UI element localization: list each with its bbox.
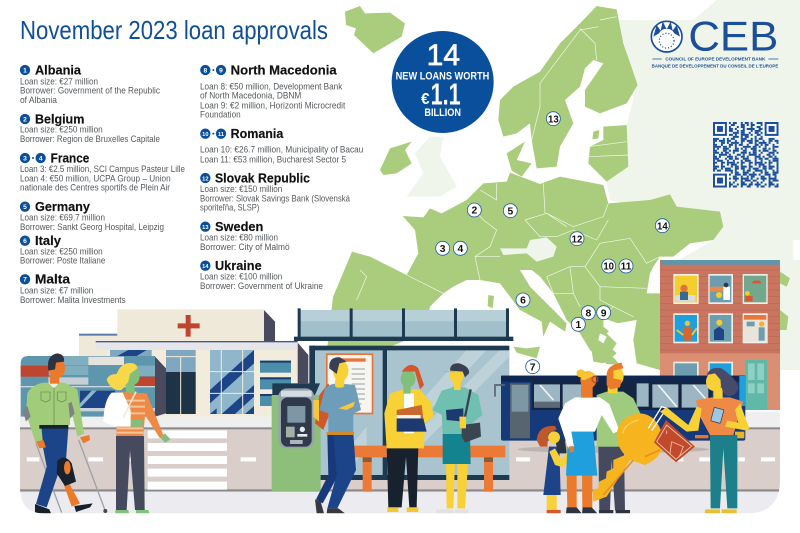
marker 14: 14 bbox=[657, 221, 668, 232]
logo: CEB: CEB bbox=[688, 14, 778, 60]
entry: North Macedonia: Loan 8: €50 million, Development Bank bbox=[200, 81, 343, 91]
entry: Ukraine: Borrower: Government of Ukraine bbox=[200, 281, 323, 291]
entry: Slovak Republic: sporiteľňa, SLSP) bbox=[200, 203, 259, 213]
Denmark bbox=[507, 142, 532, 177]
QR code bbox=[713, 122, 779, 188]
entry: Slovak Republic bbox=[200, 170, 350, 213]
entry: North Macedonia bbox=[200, 63, 346, 120]
person: woman in teal with bag bbox=[433, 363, 482, 513]
marker 8 bbox=[581, 306, 595, 320]
entry: Sweden: 13 bbox=[202, 225, 208, 231]
entry: Sweden: Borrower: City of Malmö bbox=[200, 242, 290, 252]
entry: Germany: 5 bbox=[23, 204, 27, 211]
logo: CEB: COUNCIL OF EUROPE DEVELOPMENT BANK bbox=[665, 57, 766, 62]
entry: France: 4 bbox=[39, 155, 43, 162]
road markings bbox=[27, 430, 775, 490]
entry: Romania: Loan 11: €53 million, Bucharest Sector 5 bbox=[200, 154, 346, 164]
entry: Albania: Albania bbox=[35, 63, 82, 78]
entry: North Macedonia: Loan 9: €2 million, Horizonti Microcredit bbox=[200, 100, 346, 110]
window: blue worker bbox=[673, 313, 699, 343]
entry: North Macedonia: 8 bbox=[203, 67, 207, 74]
entry: Belgium: Loan size: €250 million bbox=[20, 125, 103, 135]
marker 6: 6 bbox=[520, 296, 526, 307]
entry: Germany bbox=[20, 199, 164, 232]
entry: Malta: 7 bbox=[23, 277, 27, 284]
entry: Albania: 1 bbox=[23, 67, 27, 74]
callout: 14 new loans worth 1.1 billion: NEW LOANS WORTH bbox=[396, 70, 489, 82]
door bbox=[745, 360, 767, 410]
crosswalk bbox=[148, 430, 227, 490]
window: teal person bbox=[708, 313, 733, 343]
marker 1: 1 bbox=[575, 320, 581, 331]
entry: France bbox=[20, 150, 185, 193]
entry: Ukraine: Ukraine bbox=[215, 258, 262, 273]
marker 13: 13 bbox=[548, 114, 559, 125]
marker 5: 5 bbox=[507, 206, 513, 217]
entry: Belgium: 2 bbox=[23, 116, 27, 123]
person: woman in yellow cardigan bbox=[384, 365, 433, 512]
Scandinavia bbox=[498, 6, 638, 168]
entry: Italy: Borrower: Poste Italiane bbox=[20, 256, 105, 266]
marker 6 bbox=[516, 293, 530, 307]
callout: 14 new loans worth 1.1 billion: 14 bbox=[427, 39, 460, 72]
entry: Romania bbox=[200, 126, 363, 164]
entry: Germany: Borrower: Sankt Georg Hospital, Leipzig bbox=[20, 222, 164, 232]
map markers bbox=[436, 112, 669, 374]
marker 9 bbox=[597, 306, 611, 320]
entry: Sweden: Sweden bbox=[215, 219, 263, 234]
entry: North Macedonia: 9 bbox=[219, 67, 223, 74]
entry: North Macedonia: of North Macedonia, DBNM bbox=[200, 91, 301, 101]
logo: CEB: BANQUE DE DEVELOPPEMENT DU CONSEIL DE L'EUROPE bbox=[652, 64, 778, 69]
entry: Ukraine bbox=[200, 258, 323, 291]
marker 11: 11 bbox=[621, 262, 632, 273]
person: woman in white with blue skirt bbox=[558, 369, 619, 513]
marker 14 bbox=[655, 219, 669, 233]
entry: Germany: Germany bbox=[35, 199, 91, 214]
entry: Romania: Romania bbox=[231, 126, 284, 141]
building: brick apartment block bbox=[660, 260, 780, 410]
person: woman with phone bbox=[660, 368, 749, 513]
callout: 14 new loans worth 1.1 billion: BILLION bbox=[424, 107, 461, 119]
entry: Romania: 10 bbox=[202, 132, 208, 138]
entry: Belgium: Borrower: Region de Bruxelles Capitale bbox=[20, 134, 160, 144]
window: orange kitchen bbox=[743, 313, 768, 343]
person: girl bbox=[536, 426, 568, 514]
entry: Albania: Borrower: Government of the Republic bbox=[20, 86, 161, 96]
entry: North Macedonia: Foundation bbox=[200, 110, 241, 120]
entry: Slovak Republic: Loan size: €150 million bbox=[200, 184, 282, 194]
entry: Malta: Borrower: Malita Investments bbox=[20, 295, 126, 305]
entry: North Macedonia: North Macedonia bbox=[231, 63, 337, 78]
Austria bbox=[500, 237, 557, 262]
callout: 14 new loans worth 1.1 billion bbox=[392, 31, 494, 133]
entry: Italy bbox=[20, 233, 105, 266]
window: green room bbox=[743, 274, 768, 304]
ground bbox=[20, 412, 780, 515]
marker 8: 8 bbox=[585, 308, 591, 319]
bus bbox=[495, 376, 745, 453]
marker 9: 9 bbox=[601, 308, 607, 319]
bench bbox=[354, 446, 505, 492]
entry: Slovak Republic: Slovak Republic bbox=[215, 170, 310, 185]
entry: Italy: 6 bbox=[23, 238, 27, 245]
Ireland bbox=[380, 142, 412, 175]
callout: 14 new loans worth 1.1 billion: 1.1 bbox=[431, 78, 461, 112]
entry: Albania: Loan size: €27 million bbox=[20, 76, 98, 86]
title: November 2023 loan approvals bbox=[20, 15, 328, 45]
ticket machine bbox=[272, 383, 321, 492]
loan list bbox=[20, 63, 363, 305]
entry: Romania: 11 bbox=[218, 132, 224, 138]
bus shelter bbox=[294, 308, 513, 492]
marker 2: 2 bbox=[471, 206, 477, 217]
marker 10: 10 bbox=[603, 262, 614, 273]
entry: France: 3 bbox=[23, 155, 27, 162]
marker 11 bbox=[619, 259, 633, 273]
entry: Germany: Loan size: €69.7 million bbox=[20, 212, 105, 222]
person: blonde woman with sling bbox=[103, 363, 171, 513]
entry: Sweden bbox=[200, 219, 290, 252]
entry: Sweden: Loan size: €80 million bbox=[200, 233, 278, 243]
mainland Europe bbox=[327, 173, 723, 370]
marker 3: 3 bbox=[440, 244, 446, 255]
marker 5 bbox=[503, 204, 517, 218]
marker 4: 4 bbox=[457, 244, 463, 255]
marker 7 bbox=[526, 360, 540, 374]
marker 3 bbox=[436, 241, 450, 255]
entry: Slovak Republic: Borrower: Slovak Savings Bank (Slovenská bbox=[200, 193, 350, 203]
entry: Italy: Italy bbox=[35, 233, 62, 248]
logo: CEB bbox=[651, 14, 778, 69]
marker 2 bbox=[467, 203, 481, 217]
entry: Ukraine: Loan size: €100 million bbox=[200, 272, 282, 282]
entry: Albania bbox=[20, 63, 161, 105]
entry: Belgium: Belgium bbox=[35, 111, 84, 126]
icon: golden key bbox=[593, 407, 667, 502]
marker 13 bbox=[546, 112, 560, 126]
person: man with crutches bbox=[23, 353, 107, 513]
marker 4 bbox=[453, 241, 467, 255]
callout: 14 new loans worth 1.1 billion: € bbox=[421, 91, 430, 108]
person: man at ticket machine bbox=[313, 357, 361, 513]
entry: Belgium bbox=[20, 111, 160, 144]
entry: Ukraine: 14 bbox=[202, 264, 209, 270]
window: lower middle bbox=[708, 362, 733, 378]
hospital bbox=[79, 309, 308, 417]
Baltic states bbox=[588, 125, 628, 182]
entry: France: Loan 4: €50 million, UCPA Group – Union bbox=[20, 173, 171, 183]
entry: Malta: Malta bbox=[35, 272, 71, 287]
icon: house key tag bbox=[654, 420, 695, 462]
marker 7: 7 bbox=[530, 362, 536, 373]
person: man in green shirt bbox=[597, 363, 643, 513]
marker 1 bbox=[571, 317, 585, 331]
entry: Romania: Loan 10: €26.7 million, Municipality of Bacau bbox=[200, 145, 363, 155]
window: lower left bbox=[673, 362, 699, 378]
window: teal living room bbox=[708, 274, 733, 304]
entry: Albania: of Albania bbox=[20, 95, 57, 105]
entry: Italy: Loan size: €250 million bbox=[20, 246, 103, 256]
entry: France: Loan 3: €2.5 million, SCI Campus Pasteur Lille bbox=[20, 164, 185, 174]
window: yellow bbox=[673, 274, 699, 304]
map of Europe bbox=[327, 0, 800, 370]
icon: red cross bbox=[178, 315, 200, 337]
entry: France: France bbox=[51, 150, 89, 165]
pale right-side scene building bbox=[660, 260, 780, 410]
Italian islands and Greece bbox=[488, 295, 494, 308]
entry: France: nationale des Centres sportifs de Plein Air bbox=[20, 183, 170, 193]
office building left bbox=[21, 356, 166, 417]
Iceland bbox=[345, 6, 405, 53]
street scene bbox=[20, 308, 780, 515]
marker 12: 12 bbox=[572, 234, 583, 245]
marker 10 bbox=[602, 259, 616, 273]
entry: Malta bbox=[20, 272, 126, 305]
entry: Slovak Republic: 12 bbox=[202, 176, 208, 182]
poster bbox=[326, 353, 373, 414]
entry: Malta: Loan size: €7 million bbox=[20, 286, 93, 296]
marker 12 bbox=[570, 232, 584, 246]
